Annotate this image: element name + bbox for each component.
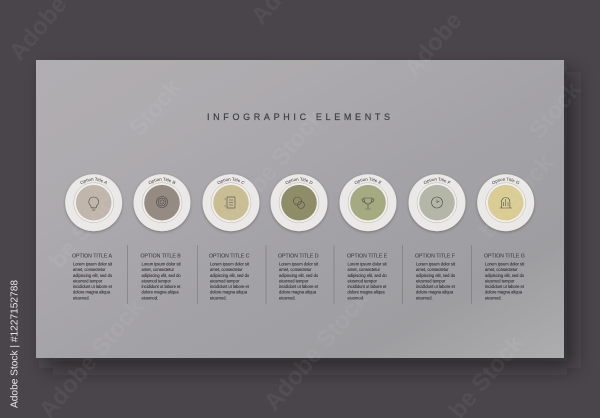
option A: Option Title A [80,178,107,184]
option D: dolore magna aliqua [279,290,317,295]
option B: amet, consectetur [142,267,175,272]
option F: amet, consectetur [416,267,449,272]
watermarks: Adobe Stock [259,286,374,416]
option E: eiusmod. [348,295,364,300]
option A: Lorem ipsum dolor sit [73,262,113,266]
watermarks: Adobe Stock [214,104,329,234]
option G: incididunt ut labore et [485,284,525,289]
option A: incididunt ut labore et [73,284,113,289]
option C: dolore magna aliqua [210,290,248,295]
icon: trophy [362,198,374,209]
side credit text: Adobe Stock | #1227152788 [8,280,20,408]
option B: adipiscing elit, sed do [142,273,181,278]
option F: incididunt ut labore et [416,284,456,289]
option C: eiusmod. [210,295,227,300]
title: INFOGRAPHIC ELEMENTS [207,112,390,122]
option E: Lorem ipsum dolor sit [348,262,387,266]
option B [132,174,192,300]
option E [338,174,398,300]
icon: padlock building [500,198,512,208]
option G [476,174,536,300]
option E: OPTION TITLE E [347,254,388,260]
option E: incididunt ut labore et [348,284,387,289]
option B: OPTION TITLE B [140,254,181,260]
option B: eiusmod. [142,295,158,300]
option A: eiusmod. [73,295,90,300]
option B: Option Title B [148,178,176,184]
option E: adipiscing elit, sed do [348,273,387,278]
option G: eiusmod. [485,295,502,300]
option C: amet, consectetur [210,267,243,272]
option G: OPTION TITLE G [484,254,525,260]
watermarks: Stock [124,74,187,142]
option F: Option Title F [424,178,451,184]
option A: dolore magna aliqua [73,290,111,295]
option B: Lorem ipsum dolor sit [142,262,181,266]
option C [201,174,261,300]
option F [407,174,467,300]
option C: eiusmod tempor [210,278,240,284]
icon: mobile device [224,197,235,208]
option A [64,174,124,300]
option G: eiusmod tempor [485,278,515,284]
option F: Lorem ipsum dolor sit [416,262,456,266]
option G: amet, consectetur [485,267,518,272]
option C: adipiscing elit, sed do [210,273,250,278]
panel [36,60,564,358]
icon: light bulb [89,197,99,210]
watermarks: Adobe [399,7,468,82]
icon: coins [294,197,304,208]
option A: amet, consectetur [73,267,106,272]
watermarks: be Stock [474,149,559,244]
option D [269,174,329,300]
option F: eiusmod. [416,295,433,300]
icon: target [156,196,168,208]
option A: eiusmod tempor [73,278,103,284]
panel shadow [46,72,574,368]
option C: OPTION TITLE C [209,254,250,260]
option E: dolore magna aliqua [348,290,385,295]
option B: eiusmod tempor [142,278,171,284]
option D: OPTION TITLE D [278,254,319,260]
option G: Option Title G [492,178,520,184]
watermarks: Stock [524,76,587,144]
option D: amet, consectetur [279,267,312,272]
icon: clock [432,197,442,208]
option D: incididunt ut labore et [279,284,319,289]
option D: adipiscing elit, sed do [279,273,319,278]
option C: incididunt ut labore et [210,284,250,289]
option E: Option Title E [354,178,382,184]
option F: adipiscing elit, sed do [416,273,456,278]
option F: OPTION TITLE F [415,254,455,260]
option B: incididunt ut labore et [142,284,181,289]
option A: adipiscing elit, sed do [73,273,113,278]
option D: eiusmod. [279,295,296,300]
option E: amet, consectetur [348,267,381,272]
option C: Option Title C [218,178,245,184]
option E: eiusmod tempor [348,278,377,284]
option A: OPTION TITLE A [72,254,113,260]
option G: adipiscing elit, sed do [485,273,525,278]
option B: dolore magna aliqua [142,290,179,295]
option D: Lorem ipsum dolor sit [279,262,319,266]
option F: dolore magna aliqua [416,290,454,295]
option C: Lorem ipsum dolor sit [210,262,250,266]
watermarks: be Stock [44,179,129,274]
option F: eiusmod tempor [416,278,446,284]
option G: dolore magna aliqua [485,290,523,295]
option D: Option Title D [286,178,312,184]
option D: eiusmod tempor [279,278,309,284]
option G: Lorem ipsum dolor sit [485,262,525,266]
